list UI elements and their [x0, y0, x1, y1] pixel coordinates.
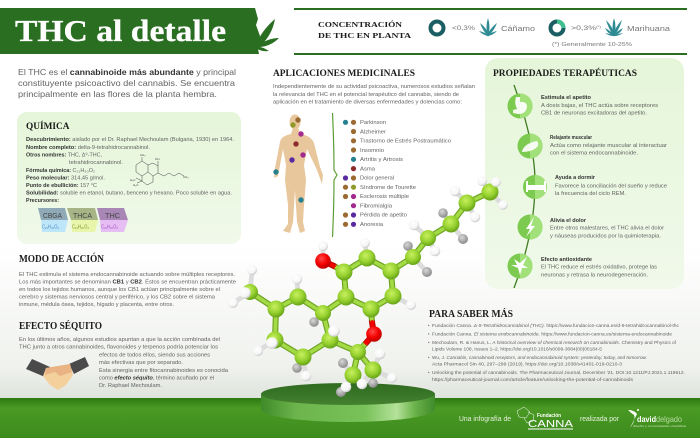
logo: David Delgado	[628, 409, 687, 428]
property: appetite: CB1 de neuronas excitadoras del apetito.	[541, 110, 647, 116]
references: •	[428, 370, 430, 375]
logo: David Delgado: daviddelgado	[637, 415, 682, 424]
precursor: THC: THC	[105, 213, 120, 220]
mode of action text	[19, 272, 236, 308]
references: Wu, J. Cannabis, cannabinoid receptors, and endocannabinoid system: yesterday, today, and tomorrow.	[432, 355, 647, 360]
property: muscle relaxant	[518, 134, 667, 158]
applications intro: Independientemente de su actividad psicoactiva, numerosos estudios señalan	[273, 84, 475, 90]
applications intro	[273, 84, 475, 106]
section: medical applications	[273, 68, 475, 237]
list of conditions: Asma	[360, 166, 376, 172]
entourage text: Dr. Raphael Mechoulam.	[99, 383, 162, 389]
property: antioxidant: Efecto antioxidante	[541, 257, 592, 263]
property: appetite: A dosis bajas, el THC actúa sobre receptores	[541, 103, 659, 109]
precursor: THCA: THCA	[73, 213, 92, 220]
intro text: El THC es el cannabinoide más abundante y principal	[18, 68, 236, 77]
hydrogen bonds	[233, 181, 503, 392]
section: further reading	[428, 308, 685, 382]
precursor: CBGA: C₂₂H₃₂O₄	[42, 224, 59, 230]
donut: marijuana	[550, 22, 564, 34]
precursor: CBGA: CBGA	[43, 213, 62, 220]
references: Acta Pharmacol Sin 40, 297–299 (2019). https://doi.org/10.1038/s41401-019-0210-3	[432, 362, 623, 366]
chemistry facts: Nombre completo: delta-9-tetrahidrocannabinol.	[26, 145, 150, 151]
donut: hemp	[430, 22, 444, 34]
grey hydrogen atoms	[292, 208, 468, 397]
precursor chain	[38, 208, 128, 232]
references: Fundación Canna. El sistema endocannabinoide. https://www.fundacion-canna.es/sistema-endocannabinoide	[432, 332, 673, 336]
entourage text: efectos de todos ellos, siendo sus acciones	[99, 352, 210, 358]
precursor: THCA: C₂₂H₃₀O₄	[72, 224, 89, 230]
references: Fundación Canna. Δ-9-Tetrahidrocannabinol (THC). https://www.fundacion-canna.es/d-9-tetrahidrocannabinol-thc	[432, 323, 679, 328]
precursor: THC	[97, 208, 128, 232]
further reading heading: PARA SABER MÁS	[429, 308, 513, 320]
list of conditions: Insomnio	[360, 148, 384, 154]
list of conditions: Síndrome de Tourette	[360, 185, 416, 191]
concentration strip	[294, 8, 687, 55]
property: pain relief: Alivia el dolor	[550, 218, 586, 224]
entourage text: THC junto a otros cannabinoides, flavonoides y terpenos podría potenciar los	[19, 344, 218, 350]
concentration heading: CONCENTRACIÓN	[318, 19, 403, 29]
icon: handshake	[26, 357, 89, 390]
chemistry facts: Precursores:	[26, 198, 59, 204]
icon: stomach	[508, 94, 532, 118]
chemistry heading: QUÍMICA	[26, 120, 70, 132]
applications intro: aplicación en el tratamiento de diversas enfermedades y dolencias como:	[273, 100, 462, 106]
list of conditions: Fibromialgia	[360, 203, 393, 209]
marijuana label: Marihuana	[627, 24, 671, 33]
structural formula of THC: H₃C	[130, 178, 136, 182]
icon: bed	[523, 175, 547, 199]
title banner	[0, 8, 260, 54]
structural formula of THC	[130, 153, 189, 187]
property: sleep: la frecuencia del ciclo REM.	[555, 191, 626, 197]
list markers	[343, 120, 356, 227]
white hydrogen atoms	[228, 176, 508, 392]
mode of action text: inmune, médula ósea, tejidos, hígado y placenta, entre otros.	[19, 302, 174, 308]
list of conditions: Pérdida de apetito	[360, 213, 407, 219]
human body figure	[273, 114, 323, 233]
concentration heading	[318, 19, 412, 40]
property: pain relief	[518, 214, 664, 240]
references: •	[428, 340, 430, 345]
panel: chemistry	[17, 112, 241, 244]
list of conditions: Dolor general	[360, 176, 394, 182]
entourage text: más efectivas que por separado.	[99, 360, 183, 366]
list of conditions	[360, 120, 451, 228]
icon: muscle	[518, 134, 542, 158]
property: antioxidant: El THC reduce el estrés oxidativo, protege las	[541, 264, 658, 270]
title text: THC al detalle	[15, 13, 226, 48]
THC 3D molecule	[228, 176, 508, 397]
property: pain relief: y náuseas producidos por la quimioterapia.	[550, 234, 661, 240]
list of conditions: Trastorno de Estrés Postraumático	[360, 138, 451, 144]
entourage text	[19, 337, 228, 389]
chemistry facts: Descubrimiento: aislado por el Dr. Raphael Mechoulam (Bulgaria, 1930) en 1964.	[26, 137, 234, 143]
references: Unlocking the potential of cannabinoids. The Pharmaceutical Journal, December '21. DOI:10.1211/PJ.2021.1.119612.	[432, 370, 685, 375]
timeline stem	[514, 85, 535, 288]
property: antioxidant: neuronas y retrasa la neurodegeneración.	[541, 272, 648, 278]
icon: neuron	[508, 254, 532, 278]
entourage heading: EFECTO SÉQUITO	[19, 320, 102, 332]
property: muscle relaxant: con el sistema endocannabinoide.	[550, 150, 638, 156]
credit text one: Una infografía de	[459, 416, 511, 423]
chemistry facts: Otros nombres: THC, Δ⁹-THC,	[26, 152, 102, 158]
property: muscle relaxant: Relajante muscular	[550, 135, 592, 141]
logo: Fundación CANNA: CANNA	[528, 419, 573, 430]
mode of action text: cerebro y sistemas nerviosos central y periférico, y los CB2 sobre el sistema	[19, 294, 215, 300]
applications intro: la relevancia del THC en el potencial terapéutico del cannabis, siendo de	[273, 92, 459, 98]
property: sleep: Favorece la conciliación del sueño y reduce	[555, 184, 667, 190]
logo: Fundación CANNA	[517, 407, 573, 430]
hemp label: Cáñamo	[501, 24, 535, 33]
icon: lightning bolt	[518, 214, 542, 240]
property: appetite	[508, 94, 659, 118]
body markers	[273, 117, 306, 203]
molecule platform	[261, 383, 435, 422]
footer credits	[459, 407, 687, 430]
entourage text: como efecto séquito , término acuñado por el	[99, 376, 214, 382]
references: Mechoulam, R. & Hanus, L. A historical overview of chemical research on cannabinoids. Chemistry and Physics of	[432, 340, 677, 345]
structural formula of THC: OH	[155, 157, 160, 161]
icon: marijuana leaf	[605, 18, 623, 37]
mode of action text: El THC estimula el sistema endocannabinoide actuando sobre múltiples receptores.	[19, 272, 235, 278]
marijuana value: >0,3%	[571, 25, 590, 32]
chemistry facts	[26, 137, 234, 204]
mode of action heading: MODO DE ACCIÓN	[19, 253, 105, 265]
references: Lipids Volume 108, Issues 1–2. https://doi.org/10.1016/s0009-3084(00)00184-5	[432, 346, 603, 352]
references	[428, 323, 685, 382]
section: entourage effect	[19, 320, 228, 390]
chemistry facts: Solubilidad: soluble en etanol, butano, benceno y hexano. Poco soluble en agua.	[26, 190, 232, 196]
section: mode of action	[19, 253, 236, 308]
chemistry facts: Fórmula química: C₂₁H₃₀O₂	[26, 168, 95, 174]
property: muscle relaxant: Actúa como relajante muscular al interactuar	[550, 143, 667, 149]
footer band	[0, 398, 700, 438]
hemp value: <0,3%	[452, 25, 475, 32]
property: appetite: Estimula el apetito	[541, 95, 591, 101]
property: pain relief: Entre otros malestares, el THC alivia el dolor	[550, 226, 664, 232]
applications heading: APLICACIONES MEDICINALES	[273, 68, 415, 79]
structural formula of THC: H₃C	[133, 183, 139, 187]
marijuana value: (*)	[596, 25, 601, 29]
entourage text: Esta sinergia entre fitocannabinoides es conocida	[99, 368, 228, 374]
carbon bonds, highlight	[250, 192, 490, 375]
list of conditions: Alzheimer	[360, 129, 386, 135]
carbon bonds, outer shade	[250, 192, 490, 375]
property: sleep: Ayuda a dormir	[555, 175, 595, 181]
references: •	[428, 355, 430, 360]
precursor: CBGA	[38, 208, 68, 232]
footnote: (*) Generalmente 10-25%	[552, 42, 633, 48]
chemistry facts: tetrahidrocannabinol.	[69, 160, 123, 166]
precursor: THCA	[67, 208, 98, 232]
property: sleep	[523, 175, 667, 199]
carbon atoms	[242, 184, 498, 384]
concentration heading: DE THC EN PLANTA	[318, 31, 412, 40]
precursor: THC: C₂₁H₃₀O₂	[101, 224, 118, 230]
icon: cannabis leaf beside title	[252, 19, 279, 51]
references: •	[428, 323, 430, 328]
intro text: constituyente psicoactivo del cannabis. Se encuentra	[18, 79, 236, 88]
mode of action text: Los más importantes se denominan CB1 y CB2. Éstos se encuentran prácticamente	[19, 278, 236, 286]
oxygen atoms	[315, 253, 382, 342]
list of conditions: Esclerosis múltiple	[360, 194, 409, 200]
credit text two: realizada por	[580, 416, 620, 423]
chemistry facts: Punto de ebullición: 157 °C	[26, 183, 97, 189]
panel: therapeutic properties	[485, 58, 684, 289]
intro text	[18, 68, 236, 99]
chemistry facts: Peso molecular: 314,45 g/mol.	[26, 176, 105, 182]
references: https://pharmaceutical-journal.com/article/feature/unlocking-the-potential-of-cannabinoids	[432, 377, 633, 382]
property: antioxidant	[508, 254, 658, 278]
entourage text: En los últimos años, algunos estudios apuntan a que la acción combinada del	[19, 337, 220, 343]
brace divider	[332, 113, 337, 237]
structural formula of THC: CH₃	[183, 175, 189, 179]
icon: hemp leaf	[479, 18, 497, 37]
list of conditions: Parkinson	[360, 120, 386, 126]
references: •	[428, 332, 430, 336]
therapeutic heading: PROPIEDADES TERAPÉUTICAS	[493, 67, 637, 79]
list of conditions: Artritis y Artrosis	[360, 157, 403, 163]
logo: David Delgado: diseño y comunicación científica	[633, 424, 687, 428]
structural formula of THC: CH₃	[140, 153, 146, 157]
logo: Fundación CANNA: Fundación	[537, 413, 561, 419]
intro text: principalmente en las flores de la planta hembra.	[18, 90, 217, 99]
mode of action text: en todos los tejidos humanos, aunque los CB1 actúan principalmente sobre el	[19, 287, 220, 293]
list of conditions: Anorexia	[360, 222, 384, 228]
